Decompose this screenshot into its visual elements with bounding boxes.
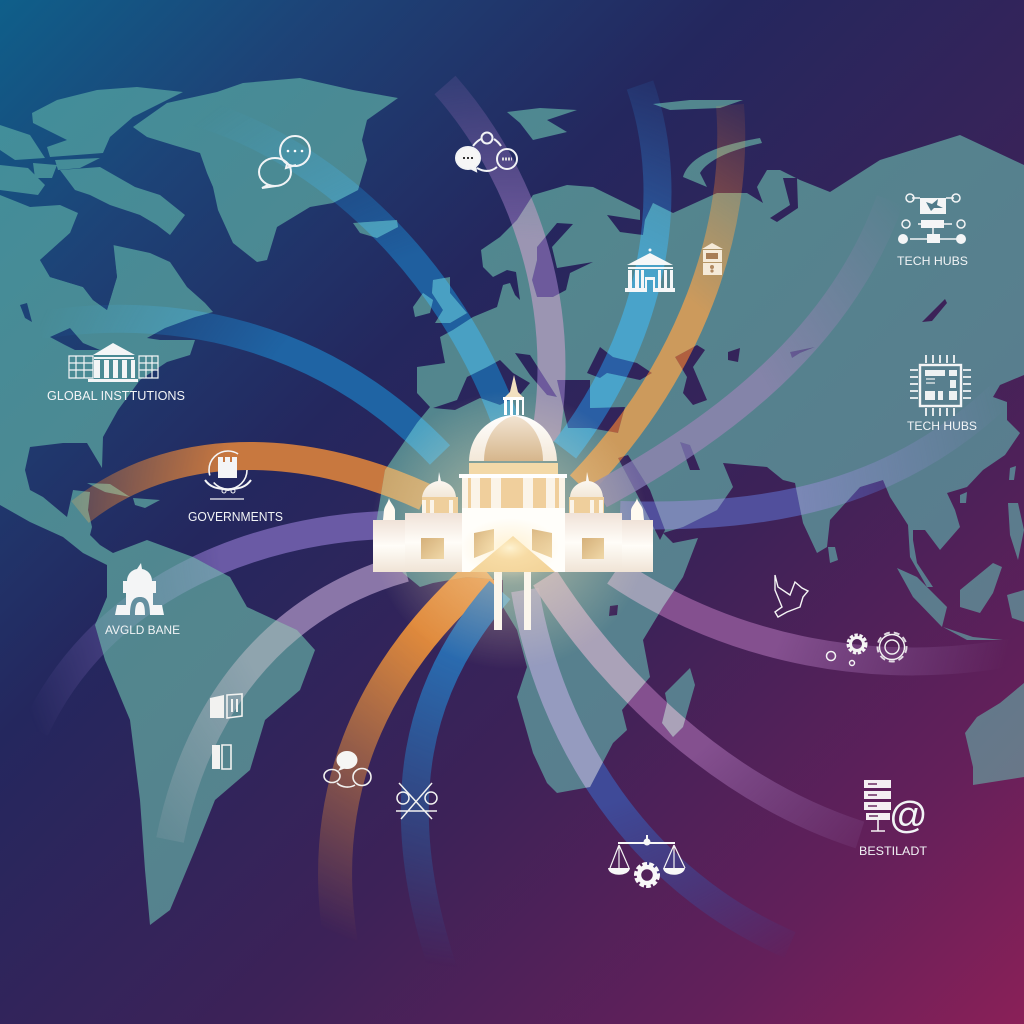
cathedral icon with label	[105, 563, 180, 637]
icon: crossed tools	[396, 783, 437, 819]
icon: small tower	[702, 243, 723, 275]
label: governments: GOVERNMENTS	[188, 510, 283, 524]
pediment	[470, 536, 555, 572]
tech hubs network icon with label	[897, 194, 968, 268]
connection arcs over land	[71, 103, 964, 842]
icon: network bubbles	[456, 132, 517, 171]
icon: gears	[826, 632, 906, 666]
outer turrets	[383, 498, 644, 520]
icon: bank top	[625, 248, 675, 292]
icon: scales with gear	[608, 835, 685, 886]
server at icon with label: @	[889, 795, 928, 837]
label: tech hubs: TECH HUBS	[907, 419, 977, 433]
icon: speech bubbles greenland	[259, 136, 310, 188]
icon: open book upper	[210, 694, 242, 718]
label: avgld bane: AVGLD BANE	[105, 623, 180, 637]
label: bestiladt: BESTILADT	[859, 846, 927, 858]
spire and lantern	[503, 375, 524, 415]
main dome	[469, 415, 557, 461]
icon: open book lower	[212, 745, 231, 769]
tech hubs chip icon with label	[907, 355, 977, 433]
server at icon with label	[859, 780, 928, 858]
soft centre highlight	[460, 518, 560, 578]
building wings	[373, 508, 653, 572]
governments emblem with label	[188, 451, 283, 524]
central capitol building	[373, 375, 653, 630]
windows	[421, 529, 604, 559]
icon: speech chain	[324, 751, 371, 787]
side domes	[422, 472, 604, 513]
legs	[494, 572, 531, 630]
icon: dove	[775, 575, 808, 617]
central glow	[370, 390, 650, 670]
label: global institutions: GLOBAL INSTTUTIONS	[47, 389, 185, 403]
colonnade	[459, 463, 567, 508]
global institutions icon with label	[47, 343, 185, 403]
label: tech hubs: TECH HUBS	[897, 254, 968, 268]
